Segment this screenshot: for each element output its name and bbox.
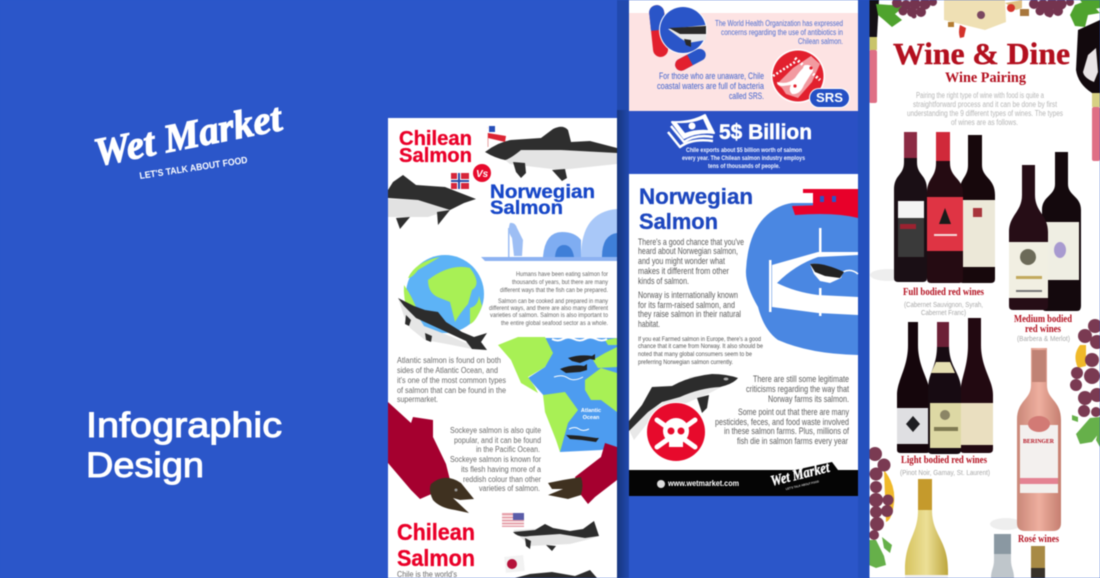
text: medium bodied caption: (Barbera & Merlot) <box>1017 336 1070 343</box>
heading: Infographic Design <box>86 406 282 485</box>
panel: Norwegian salmon <box>629 174 858 470</box>
text: Norwegian salmon intro: heard about Norwegian salmon, <box>638 246 738 257</box>
text: medium bodied caption: red wines <box>1025 324 1061 335</box>
text: intro on salmon <box>489 271 609 327</box>
text: Norway farm raised: habitat. <box>638 319 660 330</box>
logo: footer Wet Market: Wet Market <box>769 460 832 490</box>
text: full bodied caption: (Cabernet Sauvignon, Syrah, <box>904 302 983 309</box>
icon: US flag and salmon <box>502 513 599 551</box>
logo: footer Wet Market: LET'S TALK ABOUT FOOD <box>785 479 820 491</box>
panel: Wine and Dine <box>868 0 1100 578</box>
icon: versus badge <box>473 164 491 182</box>
heading: Chilean Salmon: Chilean <box>399 128 472 150</box>
text: World Health Organization: The World Health Organization has expressed <box>715 19 843 28</box>
heading: Chilean Salmon lower <box>397 519 475 571</box>
icon: igloo and person <box>481 209 617 261</box>
text: intro on salmon: different ways, and there are also many different <box>489 305 608 312</box>
text: exports <box>682 147 805 170</box>
text: coastal waters SRS: coastal waters are full of bacteria <box>657 81 764 91</box>
icon: grapes and cheese top <box>876 0 1100 38</box>
text: Norwegian salmon intro: There's a good chance that you've <box>638 237 744 248</box>
icon: Chilean salmon with flag <box>485 126 617 181</box>
icon: side wine bottle right <box>1076 20 1100 161</box>
text: Norway farm raised: Norway is internationally known <box>638 290 738 301</box>
heading: Wine Pairing: Wine Pairing <box>945 70 1026 86</box>
text: full bodied caption: Full bodied red wines <box>903 287 984 298</box>
text: coastal waters SRS: called SRS. <box>729 91 764 101</box>
heading: Chilean Salmon <box>399 128 472 167</box>
text: full bodied caption: Cabernet Franc) <box>921 310 966 317</box>
icon: grapes left <box>868 447 894 568</box>
text: legitimate criticisms: Norway farms its salmon. <box>768 394 849 405</box>
text: Sockeye salmon: its flesh having more of a <box>461 465 541 474</box>
text: light bodied caption: (Pinot Noir, Gamay, St. Laurent) <box>900 470 990 477</box>
text: Sockeye salmon: Sockeye salmon is known for <box>450 455 541 464</box>
icon: sockeye salmon right <box>548 443 617 504</box>
footer bar <box>629 460 858 496</box>
icon: pill capsule vertical <box>648 4 669 58</box>
text: intro on salmon: different ways that the fish can be prepared. <box>500 287 608 294</box>
icon: globe with salmon <box>398 255 487 350</box>
text: Atlantic salmon: supermarket. <box>397 395 438 404</box>
text: Norway farm raised <box>638 290 741 330</box>
text: Atlantic salmon: it's one of the most common types <box>397 376 506 385</box>
icon: white wine bottles <box>905 479 1045 578</box>
text: website: www.wetmarket.com <box>667 479 739 488</box>
text: wine intro <box>907 91 1063 127</box>
text: Norway farm raised: they raise salmon in their natural <box>638 309 741 320</box>
text: intro on salmon: Humans have been eating salmon for <box>516 271 609 278</box>
heading: Chilean Salmon lower: Chilean <box>397 519 475 545</box>
text: intro on salmon: varieties of salmon. Salmon is also important to <box>490 312 608 319</box>
heading: 5$ Billion: 5$ Billion <box>719 121 812 144</box>
text: legitimate criticisms: criticisms regarding the way that <box>746 384 849 395</box>
heading: Chilean Salmon: Salmon <box>399 145 472 167</box>
text: intro on salmon: Salmon can be cooked and prepared in many <box>498 298 609 305</box>
icon: salmon <box>629 374 738 440</box>
icon: salmon in blue circle <box>659 6 707 54</box>
text: intro on salmon: thousands of years, but there are many <box>512 279 609 286</box>
icon: SRS bacteria <box>771 49 850 108</box>
badge: SRS: SRS <box>816 90 843 105</box>
text: Norwegian salmon intro: and you might wonder what <box>638 256 725 267</box>
text: farmed salmon in Europe: preferring Norwegian salmon currently. <box>638 360 733 366</box>
icon: medium bodied red wine bottles <box>1009 152 1081 311</box>
map: Atlantic Ocean: Atlantic <box>581 408 601 414</box>
text: exports: tens of thousands of people. <box>708 163 780 170</box>
text: farmed salmon in Europe: If you eat Farmed salmon in Europe, there's a good <box>638 337 761 343</box>
heading: Chilean Salmon lower: Salmon <box>397 545 475 571</box>
text: coastal waters SRS <box>657 71 764 101</box>
text: intro on salmon: the entire global seafood sector as a whole. <box>501 320 608 327</box>
text: legitimate criticisms: There are still some legitimate <box>753 374 849 385</box>
text: pesticides and fish deaths: pesticides, feces, and food waste involved <box>715 417 849 428</box>
text: Sockeye salmon: varieties of salmon. <box>479 484 540 493</box>
text: coastal waters SRS: For those who are unaware, Chile <box>659 71 764 81</box>
text: exports: Chile exports about $5 billion worth of salmon <box>686 147 802 154</box>
text: Sockeye salmon: popular, and it can be found <box>454 436 541 445</box>
map: Atlantic Ocean: Ocean <box>583 415 600 421</box>
icon: sockeye salmon left <box>388 402 474 513</box>
icon: full bodied red wine bottles <box>870 132 995 283</box>
text: Sockeye salmon: reddish colour than other <box>463 475 541 484</box>
text: wine intro: of wines are as follows. <box>951 118 1018 127</box>
icon: pill capsule tilted <box>673 47 708 73</box>
heading: Norwegian Salmon: Salmon <box>490 198 563 219</box>
map: salmon farm bay <box>746 203 858 355</box>
text: Atlantic salmon: Atlantic salmon is found on both <box>397 356 501 365</box>
heading: Norwegian Salmon <box>639 184 753 234</box>
text: wine intro: Pairing the right type of wine with food is quite a <box>916 91 1044 100</box>
text: pesticides and fish deaths: Some point out that there are many <box>738 407 849 418</box>
panel: 5$ billion <box>629 111 858 173</box>
heading: Infographic Design: Design <box>86 446 204 485</box>
text: Norwegian salmon intro: kinds of salmon. <box>638 276 689 287</box>
map: Atlantic Ocean <box>498 337 617 452</box>
text: wine intro: understanding the 9 different types of wines. The types <box>907 109 1063 118</box>
logo: Wet Market: LET'S TALK ABOUT FOOD <box>139 155 248 182</box>
icon: grapes right <box>1070 319 1100 447</box>
text: Sockeye salmon: in the Pacific Ocean. <box>476 445 540 454</box>
heading: Norwegian Salmon: Norwegian <box>490 182 595 203</box>
heading: Norwegian Salmon <box>490 182 595 219</box>
text: Sockeye salmon: Sockeye salmon is also quite <box>450 426 541 435</box>
text: farmed salmon in Europe: noted that many global consumers seem to be <box>638 352 753 358</box>
heading: Norwegian Salmon: Norwegian <box>639 184 753 209</box>
panel: salmon comparison <box>388 118 617 578</box>
icon: rose wine bottle <box>990 348 1061 531</box>
heading: Norwegian Salmon: Salmon <box>639 209 718 234</box>
text: farmed salmon in Europe: chance that it came from Norway. It also should be <box>638 344 764 350</box>
panel: antibiotics and bacteria <box>629 0 858 111</box>
heading: Wine and Dine: Wine & Dine <box>893 36 1070 71</box>
icon: skull and crossbones <box>646 402 706 462</box>
icon: Norwegian salmon with flag <box>388 173 476 229</box>
text: Atlantic salmon <box>397 356 506 404</box>
text: World Health Organization: Chilean salmon. <box>798 37 843 46</box>
icon: versus badge: Vs <box>476 169 489 180</box>
icon: light bodied red wine bottles <box>897 318 993 454</box>
text: Norwegian salmon intro: makes it different from other <box>638 266 729 277</box>
text: Norwegian salmon intro <box>638 237 744 287</box>
text: wine intro: straightforward process and it can be done by first <box>913 100 1058 109</box>
text: legitimate criticisms <box>746 374 849 405</box>
text: light bodied caption: Light bodied red wines <box>901 455 987 466</box>
text: pesticides and fish deaths: in these salmon farms. Plus, millions of <box>724 426 849 437</box>
heading: Infographic Design: Infographic <box>86 406 282 445</box>
logo: Wet Market: Wet Market <box>90 94 287 175</box>
text: World Health Organization: concerns regarding the use of antibiotics in <box>721 28 843 37</box>
text: medium bodied caption: Medium bodied <box>1014 314 1072 325</box>
text: Sockeye salmon <box>450 426 541 493</box>
icon: side wine bottle left <box>869 0 879 103</box>
text: pesticides and fish deaths: fish die in salmon farms every year <box>737 436 848 447</box>
text: medium bodied caption <box>1014 314 1072 343</box>
text: full bodied caption <box>903 287 984 317</box>
text: light bodied caption <box>900 455 990 477</box>
text: rose caption: Rosé wines <box>1018 534 1059 545</box>
icon: rose wine bottle: BERINGER <box>1023 438 1054 445</box>
text: Atlantic salmon: sides of the Atlantic Ocean, and <box>397 366 498 375</box>
text: Atlantic salmon: of salmon that can be found in the <box>397 386 506 395</box>
text: pesticides and fish deaths <box>715 407 849 447</box>
icon: globe <box>657 480 665 488</box>
icon: red boat <box>792 189 858 218</box>
text: farmed salmon in Europe <box>638 337 764 366</box>
text: Norway farm raised: for its farm-raised salmon, and <box>638 300 735 311</box>
text: exports: every year. The Chilean salmon industry employs <box>682 155 805 162</box>
icon: money stack <box>668 115 714 147</box>
text: World Health Organization <box>715 19 843 46</box>
icon: Japan flag and salmon <box>504 555 597 578</box>
